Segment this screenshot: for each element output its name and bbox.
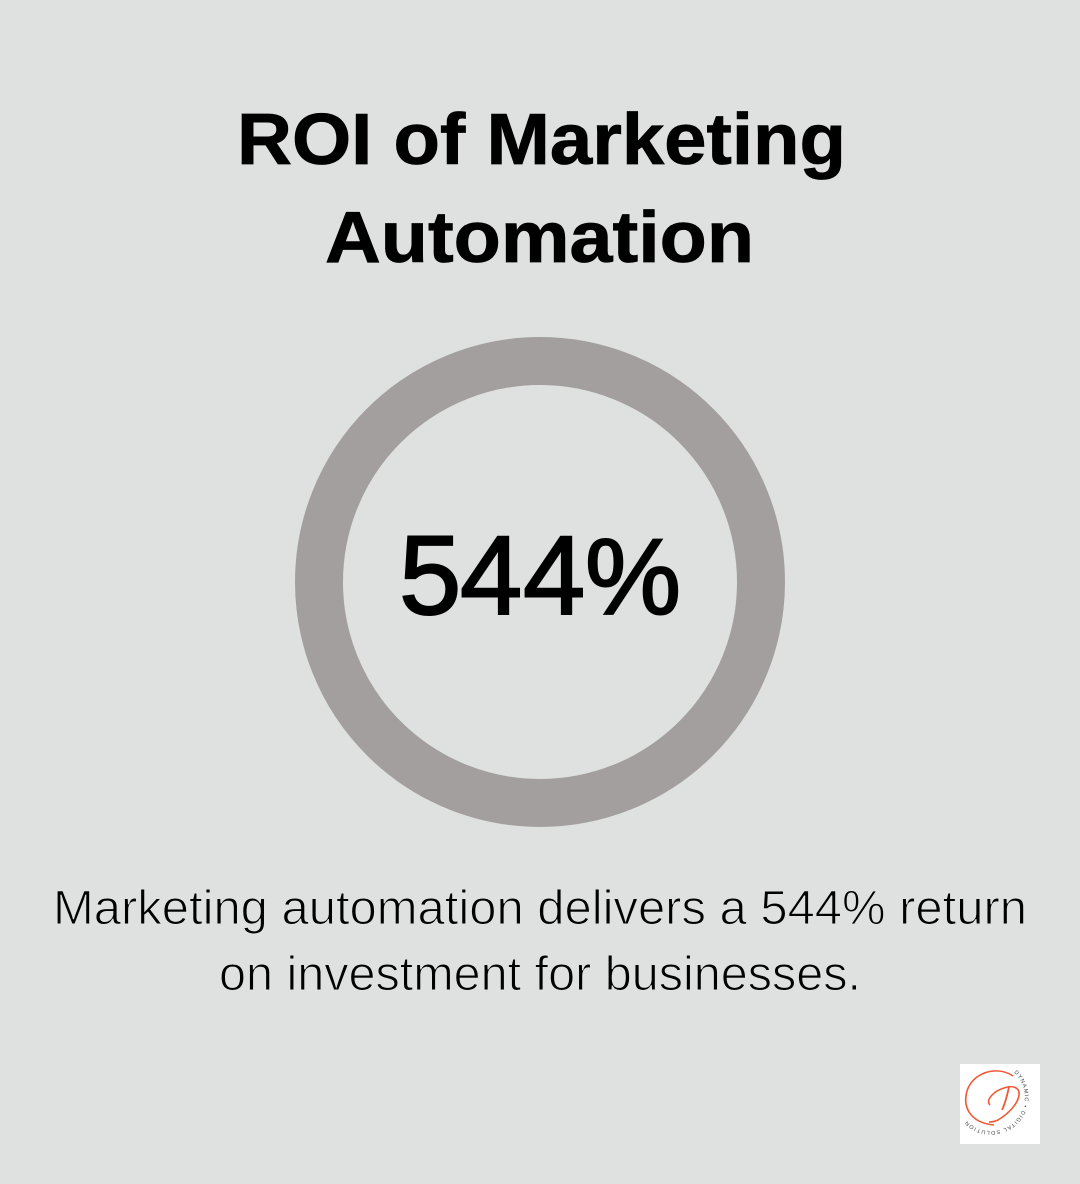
description: on investment for businesses.: [219, 948, 861, 1001]
stat value: %: [585, 516, 681, 637]
donut ring: [319, 361, 761, 803]
title: [237, 100, 846, 278]
description: Marketing automation delivers a 544% return: [53, 882, 1027, 935]
title: Automation: [325, 198, 754, 278]
logo: DYNAMIC • DIGITAL SOLUTIONS: [964, 1070, 1029, 1135]
stat value: 544: [399, 513, 585, 638]
title: ROI of Marketing: [237, 100, 846, 180]
description: [53, 882, 1027, 1001]
